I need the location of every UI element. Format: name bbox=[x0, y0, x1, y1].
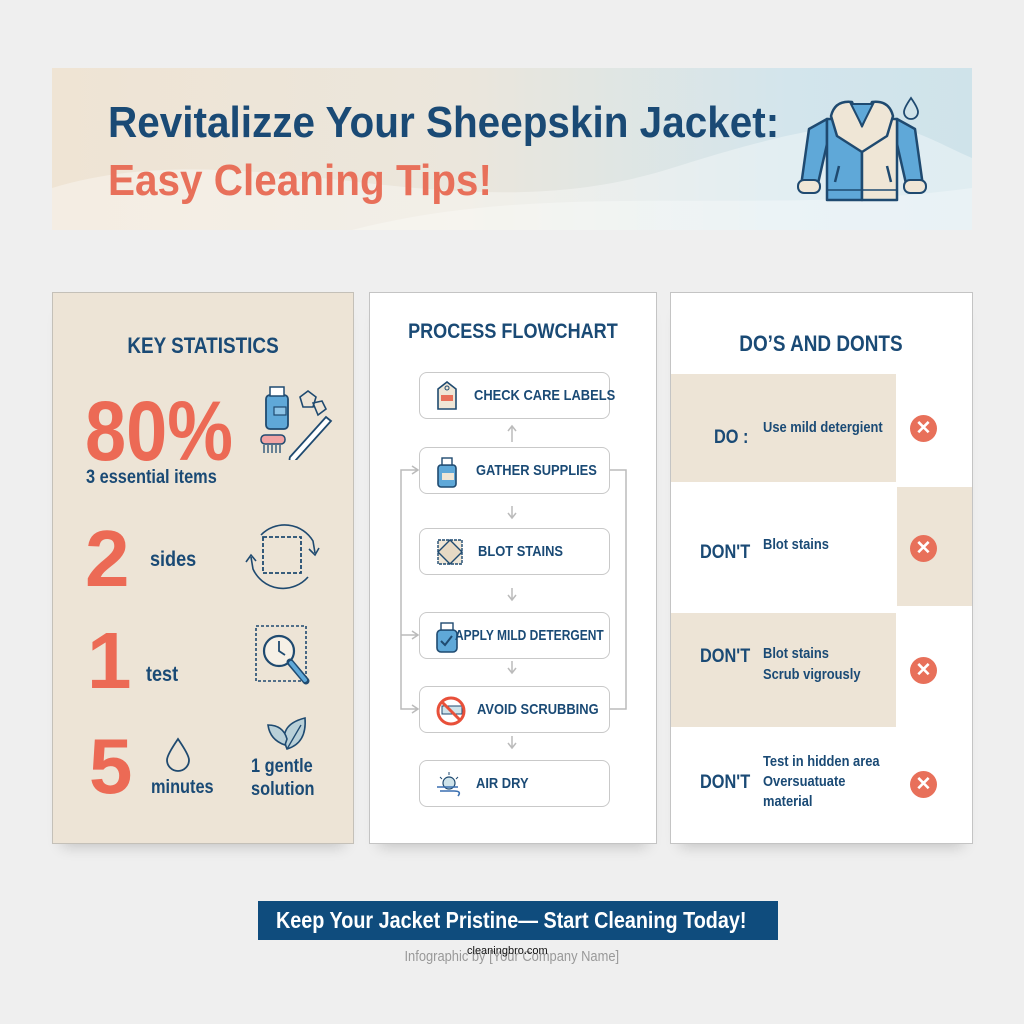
step: check care labels bbox=[419, 372, 610, 419]
row: don't blot stains: ✕ bbox=[916, 538, 931, 559]
panel: key statistics: minutes bbox=[151, 777, 214, 798]
step: avoid scrubbing bbox=[419, 686, 610, 733]
heading: process flowchart: PROCESS FLOWCHART bbox=[408, 320, 618, 343]
icon: supplies bbox=[260, 386, 332, 460]
row: don't blot stains scrub vigorously: DON'T bbox=[700, 646, 750, 667]
stat: 5 minutes: 5 bbox=[89, 722, 132, 810]
step: avoid scrubbing: AVOID SCRUBBING bbox=[477, 701, 599, 718]
step: check care labels: CHECK CARE LABELS bbox=[474, 387, 615, 404]
icon: jacket bbox=[797, 100, 927, 202]
row: don't blot stains bbox=[700, 535, 937, 563]
row: don't blot stains: Blot stains bbox=[763, 536, 829, 553]
stat: 1 test: 1 bbox=[87, 616, 132, 705]
panel: key statistics bbox=[52, 292, 354, 844]
row: don't test / oversaturate: Test in hidden area bbox=[763, 753, 880, 770]
row: do use mild detergent: ✕ bbox=[916, 418, 931, 439]
header banner bbox=[52, 68, 972, 230]
stat label: 1 gentle solution: solution bbox=[251, 779, 315, 800]
panel: key statistics: sides bbox=[150, 548, 196, 571]
row: do use mild detergent: DO : bbox=[714, 427, 748, 448]
flowchart connectors bbox=[400, 425, 627, 749]
row: don't test / oversaturate: ✕ bbox=[916, 774, 931, 795]
row: don't test / oversaturate: material bbox=[763, 793, 812, 810]
footer banner bbox=[258, 901, 778, 940]
footer credit: Infographic by [Your Company Name] bbox=[405, 948, 619, 965]
row: don't test / oversaturate bbox=[700, 753, 937, 810]
watermark: cleaningbro.com bbox=[467, 945, 548, 957]
stat: 2 sides: 2 bbox=[85, 514, 130, 603]
stat label: 1 gentle solution: 1 gentle bbox=[251, 756, 313, 777]
row: don't blot stains scrub vigorously: Blot stains bbox=[763, 645, 829, 662]
row: don't blot stains scrub vigorously bbox=[700, 645, 937, 684]
stat: 80%: 80% bbox=[85, 384, 233, 478]
row: don't blot stains: DON'T bbox=[700, 542, 750, 563]
panel: process flowchart bbox=[369, 292, 657, 844]
icon: drop bbox=[166, 738, 190, 772]
icon: leaf bbox=[267, 717, 306, 750]
row: do use mild detergent bbox=[714, 415, 937, 448]
title line 2: Easy Cleaning Tips! bbox=[108, 156, 492, 205]
row: don't test / oversaturate: Oversuatuate bbox=[763, 773, 845, 790]
heading: do's and donts: DO’S AND DONTS bbox=[739, 331, 903, 356]
step: blot stains bbox=[419, 528, 610, 575]
icon: magnifier clock bbox=[255, 625, 310, 684]
stat label: 3 essential items: 3 essential items bbox=[86, 467, 217, 488]
step: blot stains: BLOT STAINS bbox=[478, 543, 563, 560]
stat label: 1 gentle solution bbox=[251, 756, 315, 800]
row: don't blot stains scrub vigorously: ✕ bbox=[916, 660, 931, 681]
row: do use mild detergent: Use mild detergient bbox=[763, 419, 883, 436]
panel: key statistics: test bbox=[146, 663, 178, 686]
panel: do's and don'ts bbox=[670, 292, 973, 844]
row: don't test / oversaturate: DON'T bbox=[700, 772, 750, 793]
row: don't blot stains scrub vigorously: Scrub vigrously bbox=[763, 666, 861, 683]
step: gather supplies bbox=[419, 447, 610, 494]
icon: water drop bbox=[903, 96, 919, 120]
step: apply mild detergent: APPLY MILD DETERGENT bbox=[455, 627, 604, 644]
step: air dry bbox=[419, 760, 610, 807]
heading: key statistics: KEY STATISTICS bbox=[127, 333, 279, 358]
step: air dry: AIR DRY bbox=[476, 775, 529, 792]
step: gather supplies: GATHER SUPPLIES bbox=[476, 462, 597, 479]
footer banner: Keep Your Jacket Pristine— Start Cleaning Today! bbox=[276, 907, 746, 933]
step: apply mild detergent bbox=[419, 612, 610, 659]
icon: rotate cloth bbox=[245, 524, 320, 590]
title line 1: Revitalizze Your Sheepskin Jacket: bbox=[108, 98, 779, 147]
